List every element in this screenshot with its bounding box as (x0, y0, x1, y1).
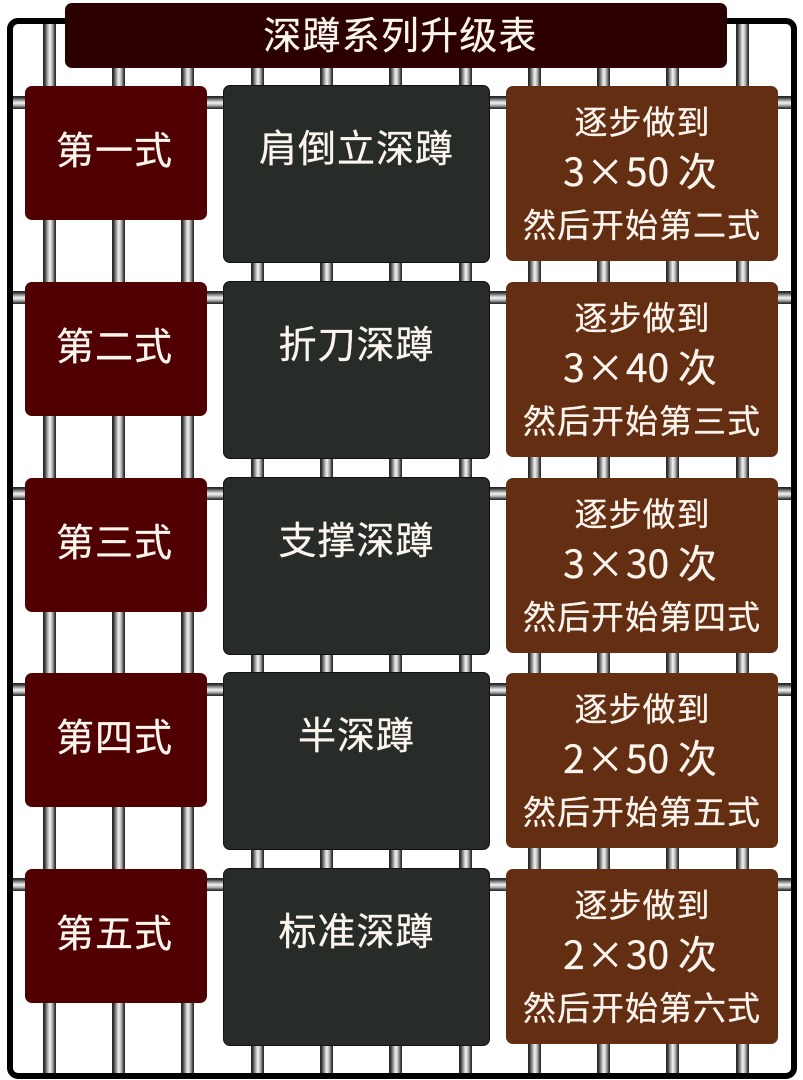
row 3 label: 第三式 (56, 523, 173, 565)
row 2 exercise: 折刀深蹲 (278, 325, 434, 367)
row 4 target: 逐步做到 (574, 691, 710, 728)
row 2 label (25, 282, 207, 416)
row 2 exercise (223, 281, 490, 459)
row 3 target: 然后开始第四式 (523, 599, 761, 636)
row 3 target: 3 30 次 (563, 534, 717, 590)
row 4 target (506, 673, 778, 848)
row 2 label: 第二式 (56, 327, 173, 369)
row 2 target: × (586, 338, 624, 393)
row 1 exercise: 肩倒立深蹲 (259, 129, 454, 171)
row 2 target: 逐步做到 (574, 300, 710, 337)
row 4 target: 2 50 次 (563, 729, 717, 785)
row 5 target: 然后开始第六式 (523, 990, 761, 1027)
row 3 target: × (586, 534, 624, 589)
row 3 exercise: 支撑深蹲 (278, 521, 434, 563)
row 4 exercise: 半深蹲 (298, 716, 415, 758)
row 1 label: 第一式 (56, 131, 173, 173)
row 5 label: 第五式 (56, 914, 173, 956)
row 5 target: 2 30 次 (563, 925, 717, 981)
title: 深蹲系列升级表 (263, 16, 538, 58)
row 1 exercise (223, 85, 490, 263)
row 5 target: × (586, 925, 624, 980)
row 4 target: 然后开始第五式 (523, 794, 761, 831)
row 2 target: 然后开始第三式 (523, 403, 761, 440)
row 3 target: 逐步做到 (574, 496, 710, 533)
row 4 target: × (586, 729, 624, 784)
row 1 label (25, 86, 207, 220)
row 3 target (506, 478, 778, 653)
row 4 label (25, 673, 207, 807)
row 5 exercise: 标准深蹲 (278, 912, 434, 954)
row 1 target: 3 50 次 (563, 142, 717, 198)
row 3 exercise (223, 477, 490, 655)
row 3 label (25, 478, 207, 612)
row 4 label: 第四式 (56, 718, 173, 760)
row 5 exercise (223, 868, 490, 1046)
row 2 target (506, 282, 778, 457)
row 1 target: 逐步做到 (574, 104, 710, 141)
row 2 target: 3 40 次 (563, 338, 717, 394)
row 1 target: × (586, 142, 624, 197)
row 1 target (506, 86, 778, 261)
row 5 target: 逐步做到 (574, 887, 710, 924)
title (65, 3, 727, 68)
row 4 exercise (223, 672, 490, 850)
row 5 target (506, 869, 778, 1044)
row 5 label (25, 869, 207, 1003)
row 1 target: 然后开始第二式 (523, 207, 761, 244)
